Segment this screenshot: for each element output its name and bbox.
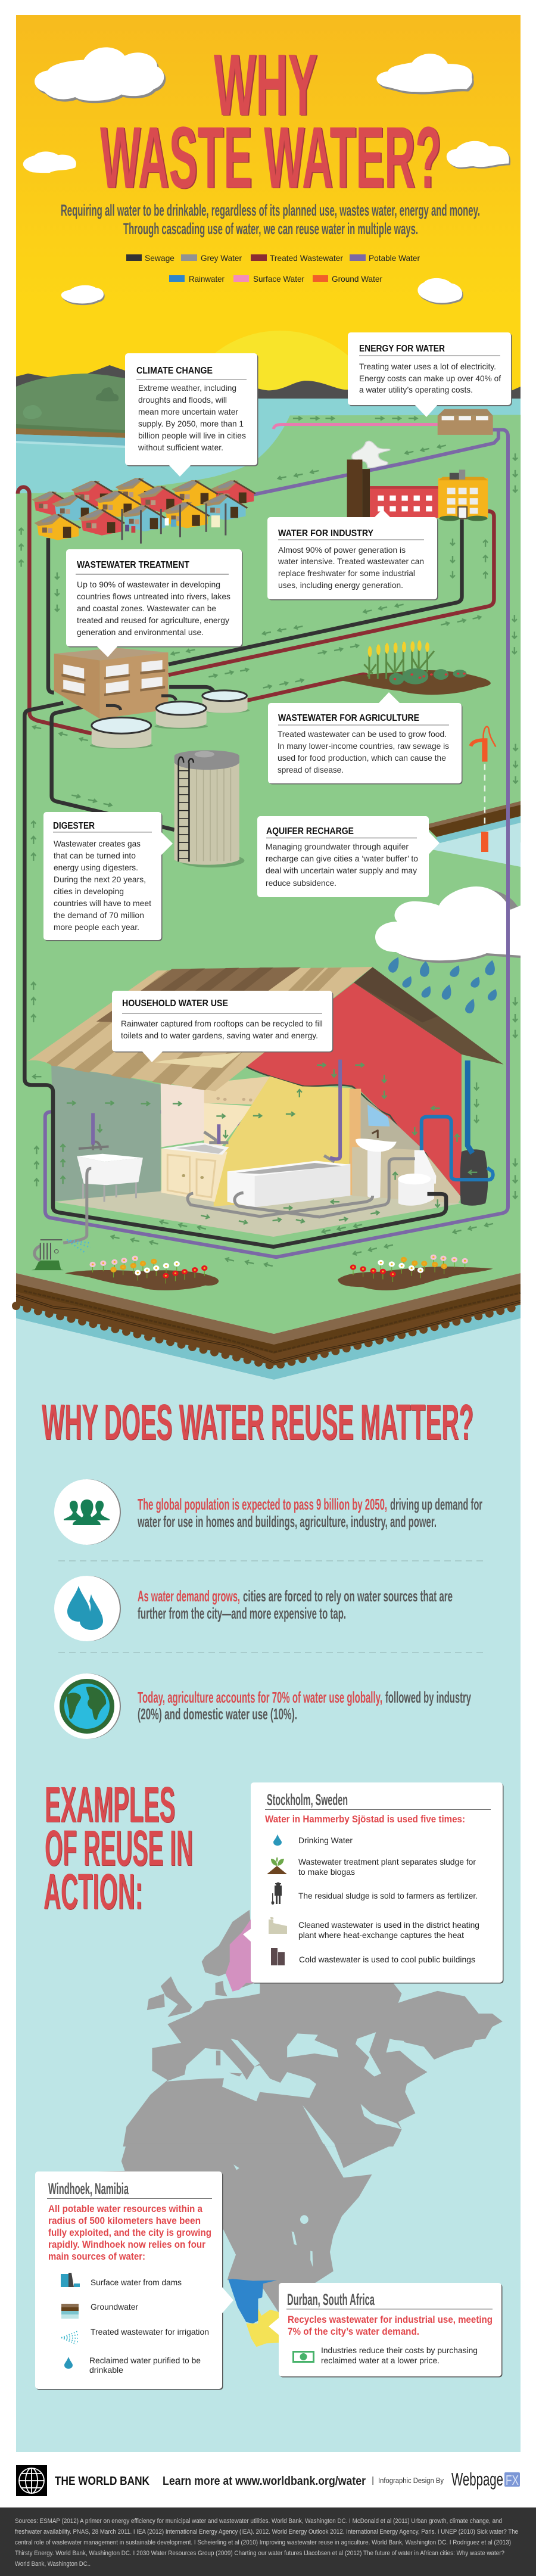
upper dark soil [16, 1284, 521, 1354]
icon: water drops [54, 1576, 121, 1641]
callout: water for industry: uses, including energy generation. [278, 580, 403, 590]
callout: energy for water: a water utility’s operating costs. [359, 385, 473, 394]
callout: wastewater treatment [66, 549, 243, 657]
callout: wastewater treatment: generation and environmental use. [77, 627, 204, 637]
callout: digester: energy using digesters. [54, 863, 138, 872]
text: OF REUSE IN [45, 1820, 193, 1876]
clothesline poles [122, 503, 226, 543]
icon: dam [61, 2273, 80, 2287]
item 2: Wastewater treatment plant separates sludge for [298, 1857, 476, 1866]
right eave [354, 967, 504, 1065]
arabia tip [334, 2144, 395, 2168]
icon: money [292, 2351, 314, 2363]
legend: Sewage [145, 253, 174, 263]
sky background [16, 15, 521, 432]
icon: drop [64, 2357, 73, 2369]
text: agriculture share: followed by industry [385, 1688, 471, 1706]
roof [27, 967, 504, 1091]
sun [174, 331, 385, 542]
lake and hills [16, 365, 521, 512]
legend: Potable Water [369, 253, 420, 263]
webpagefx logo: Webpage [451, 2469, 503, 2490]
durban summary [288, 2314, 493, 2337]
floor [55, 1178, 462, 1237]
callout: aquifer recharge [257, 816, 440, 897]
legend: Treated Wastewater [270, 253, 343, 263]
footer sources [0, 2507, 536, 2576]
icon: plant [267, 1857, 287, 1874]
hill base band [16, 424, 220, 434]
lower water background [16, 1318, 521, 2452]
green strip arrows top [293, 416, 417, 420]
callout: digester: cities in developing [54, 886, 124, 896]
callout: household water use: HOUSEHOLD WATER USE [122, 998, 228, 1009]
adriatic [230, 2039, 260, 2067]
callout: climate change: Extreme weather, including [138, 383, 236, 393]
cabinets [161, 1097, 253, 1202]
eurasia and north africa [123, 1940, 503, 2146]
cut edge wall [246, 1066, 462, 1197]
italy islands [216, 2051, 242, 2077]
subtitle [61, 201, 480, 238]
arrows household [31, 836, 518, 1268]
bath tub [228, 1156, 350, 1208]
callout: wastewater for agriculture: WASTEWATER FOR AGRICULTURE [278, 713, 419, 723]
callout: water for industry: replace freshwater for some industrial [278, 568, 415, 578]
green hill [16, 374, 220, 433]
item 4: Cleaned wastewater is used in the district heating [298, 1920, 479, 1930]
callout: climate change: supply. By 2050, more than 1 [138, 419, 244, 428]
sprinkler [32, 1240, 91, 1270]
kitchen lower wall [204, 1103, 253, 1150]
callout: digester: countries will have to meet [54, 898, 151, 908]
arrows on pipes [19, 444, 518, 828]
icon: drop [273, 1834, 282, 1846]
windhoek summary: All potable water resources within a [48, 2203, 202, 2214]
trees on hill [96, 387, 119, 402]
legend [126, 253, 420, 284]
durban item: reclaimed water at a lower price. [321, 2356, 440, 2365]
stockholm title: Stockholm, Sweden [267, 1791, 348, 1809]
pink kitchen wall [161, 1083, 219, 1147]
item 1: Drinking Water [298, 1835, 353, 1845]
lakes [233, 2164, 313, 2267]
callout: wastewater treatment: Up to 90% of wastewater in developing [77, 580, 220, 589]
treated pipe agriculture [247, 674, 369, 701]
dark roof patch [96, 967, 301, 1025]
callout: water for industry: Almost 90% of power generation is [278, 545, 406, 555]
mediterranean [167, 2048, 316, 2101]
icon: farmer [272, 1883, 282, 1905]
item: reclaimed: drinkable [89, 2365, 123, 2375]
callout: energy for water [348, 332, 512, 417]
heading: examples of reuse in action: ACTION: [43, 1863, 143, 1919]
callout: wastewater for agriculture: used for food production, which can cause the [278, 753, 446, 763]
kitchen upper cabinets [204, 1077, 270, 1105]
hill shore [16, 428, 220, 438]
callout: water for industry [267, 509, 438, 601]
item: reclaimed: Reclaimed water purified to be [89, 2356, 201, 2365]
light wave [16, 441, 220, 448]
corn and soil [334, 640, 491, 695]
callout: digester [43, 812, 173, 941]
bathroom wall [352, 1099, 462, 1203]
callout: water for industry: water intensive. Treated wastewater can [278, 556, 424, 566]
learn more: Learn more at www.worldbank.org/water [163, 2475, 366, 2488]
treated pipe left [18, 487, 92, 733]
callout: aquifer recharge: reduce subsidence. [266, 878, 336, 888]
sewage pipes [48, 538, 54, 692]
callout: wastewater for agriculture: Treated wastewater can be used to grow food. [278, 729, 447, 739]
clouds [23, 47, 510, 305]
treatment building [54, 648, 168, 719]
callout: wastewater for agriculture: In many lower-income countries, raw sewage is [278, 741, 449, 751]
ground cross-section [16, 1273, 521, 1380]
callout: digester: that can be turned into [54, 851, 136, 860]
legend: Ground Water [332, 274, 382, 284]
factory smoke [352, 441, 390, 468]
dark mountains left [16, 365, 197, 400]
water layer [16, 1281, 521, 1380]
light roof patch [154, 1052, 241, 1068]
rain drops [388, 957, 497, 1013]
title [100, 36, 441, 207]
callout: climate change: CLIMATE CHANGE [136, 366, 213, 376]
african continent [68, 2144, 372, 2313]
windhoek title: Windhoek, Namibia [48, 2180, 129, 2198]
callout: digester: During the next 20 years, [54, 875, 146, 884]
left utility wall [51, 1065, 161, 1201]
durban summary: 7% of the city’s water demand. [288, 2326, 419, 2337]
callout: wastewater treatment: treated and reused for agriculture, energy [77, 615, 229, 625]
potable pipes upper [253, 430, 508, 834]
strata line [16, 1295, 521, 1361]
legend: Rainwater [189, 274, 225, 284]
yellow wall [214, 1077, 350, 1206]
callout: wastewater treatment: and coastal zones. Wastewater can be [77, 603, 216, 613]
great britain [161, 1976, 192, 2017]
text: demand: further from the city—and more expensive to tap. [138, 1604, 346, 1622]
hand pump [469, 727, 496, 762]
icon: people [54, 1479, 121, 1545]
ireland [147, 1993, 165, 2010]
text: demand: As water demand grows, [138, 1587, 240, 1605]
design credit: Infographic Design By [378, 2476, 444, 2485]
durban item [321, 2345, 478, 2365]
potable main right pipe [45, 834, 508, 1257]
callout: energy for water: Treating water uses a lot of electricity. [359, 362, 496, 371]
flower bed left [65, 1256, 219, 1290]
text: demand [138, 1587, 453, 1622]
namibia [228, 2279, 277, 2323]
red gable wall [246, 982, 462, 1197]
heading: examples of reuse in action: EXAMPLES [45, 1777, 175, 1833]
cloud 3 [23, 151, 76, 173]
digester tank [174, 750, 244, 867]
household illustration [24, 834, 518, 1290]
durban item: Industries reduce their costs by purchasing [321, 2345, 478, 2355]
windhoek summary: radius of 500 kilometers have been [48, 2215, 201, 2226]
cloud 5 [61, 285, 105, 305]
lake [16, 399, 521, 512]
sewage pipe [24, 834, 446, 1247]
rain barrel [460, 1149, 488, 1206]
kitchen faucet [204, 1132, 228, 1144]
left bush [27, 1060, 51, 1080]
illustration upper landscape [18, 409, 518, 867]
text: agriculture share: (20%) and domestic water use (10%). [138, 1705, 297, 1723]
callout: energy for water: Energy costs can make up over 40% of [359, 374, 501, 383]
windhoek summary [48, 2203, 211, 2262]
aquifer band [429, 801, 521, 867]
south africa [246, 2309, 281, 2347]
windhoek summary: fully exploited, and the city is growing [48, 2227, 211, 2238]
icon: groundwater layers [61, 2304, 79, 2319]
callout: aquifer recharge: deal with uncertain water supply and may [266, 866, 417, 875]
callout: climate change [125, 353, 258, 477]
dark soil [16, 1281, 521, 1365]
red sea [303, 2105, 336, 2146]
cloud 6 [417, 278, 463, 304]
rain cloud [375, 886, 521, 963]
callout: climate change: mean more uncertain water [138, 407, 238, 416]
cloud 4 [447, 141, 510, 169]
rain pipes [468, 1060, 472, 1153]
callout: aquifer recharge: AQUIFER RECHARGE [266, 826, 354, 836]
callout: wastewater treatment: countries flows untreated into rivers, lakes [77, 592, 230, 601]
legend: Grey Water [201, 253, 242, 263]
legend: Surface Water [253, 274, 304, 284]
durban title: Durban, South Africa [287, 2291, 375, 2309]
windhoek summary: rapidly. Windhoek now relies on four [48, 2239, 205, 2250]
callout: digester: the demand of 70 million [54, 910, 144, 920]
pedestal sink [356, 1130, 397, 1198]
item 4 [298, 1920, 479, 1940]
aral [387, 2039, 404, 2053]
callout: durban [269, 2283, 503, 2377]
tree left [23, 405, 42, 419]
text: agriculture share [138, 1688, 471, 1723]
icon: buildings [271, 1948, 285, 1965]
energy building [438, 409, 493, 435]
utility sink [77, 1141, 143, 1202]
logo: world bank [16, 2465, 47, 2496]
settling tanks [90, 690, 250, 749]
black sea [287, 2033, 338, 2058]
factory [347, 459, 488, 521]
map: africa [68, 2144, 395, 2347]
item 2: to make biogas [298, 1867, 355, 1877]
callout: aquifer recharge: recharge can give cities a ‘water buffer’ to [266, 854, 418, 863]
item 2 [298, 1857, 476, 1877]
denmark [216, 1981, 228, 1996]
item: irrigation: Treated wastewater for irrigation [91, 2327, 209, 2337]
cloud 2 [376, 54, 474, 94]
caspian [356, 2032, 381, 2077]
callout: digester: Wastewater creates gas [54, 839, 141, 848]
item 4: plant where heat-exchange captures the heat [298, 1930, 464, 1940]
icon: heating plant [269, 1917, 287, 1934]
pipe: surface water [273, 424, 440, 429]
treated pipe right [169, 511, 494, 675]
callout: wastewater for agriculture: spread of disease. [278, 765, 344, 774]
icon: spray [61, 2331, 78, 2344]
callout: digester: more people each year. [54, 922, 139, 932]
callout: stockholm [243, 1782, 504, 1984]
window [367, 1105, 389, 1127]
icon: globe [54, 1673, 121, 1739]
item: reclaimed [89, 2356, 201, 2375]
callout: household water use: Rainwater captured from rooftops can be recycled to fill [121, 1019, 323, 1028]
item: groundwater: Groundwater [91, 2302, 138, 2311]
world bank name: THE WORLD BANK [55, 2475, 149, 2488]
stockholm subtitle: Water in Hammerby Sjöstad is used five times: [265, 1813, 465, 1825]
persian gulf [361, 2104, 401, 2129]
callout: water for industry: WATER FOR INDUSTRY [278, 528, 373, 539]
callout: windhoek [35, 2171, 233, 2390]
speckled band [24, 1291, 521, 1352]
map: europe and north africa [123, 1910, 503, 2146]
cloud 1 [35, 47, 166, 103]
orange wall [350, 1089, 361, 1195]
sweden highlight [226, 1919, 255, 1992]
item: dams: Surface water from dams [91, 2278, 182, 2287]
callout: energy for water: ENERGY FOR WATER [359, 344, 445, 354]
callout: household water use: toilets and to water gardens, saving water and energy. [121, 1031, 318, 1040]
callout: aquifer recharge: Managing groundwater through aquifer [266, 842, 409, 851]
grey pipes [63, 1168, 91, 1243]
toilet [398, 1150, 436, 1206]
divider [58, 1560, 487, 1561]
callout: climate change: without sufficient water. [138, 443, 223, 452]
scandinavia [202, 1910, 255, 1991]
pointer [269, 2317, 279, 2335]
pointer [222, 2286, 233, 2314]
callout: climate change: droughts and floods, will [138, 395, 227, 405]
dark mountains right [219, 381, 521, 400]
callout: wastewater treatment: WASTEWATER TREATMENT [77, 560, 189, 570]
shallow water [16, 434, 220, 446]
light soil [16, 1273, 521, 1345]
household pipes [330, 1060, 340, 1159]
text: population [137, 1495, 482, 1530]
callout: climate change: billion people will live in cities [138, 431, 246, 440]
flower bed right [338, 1255, 493, 1290]
durban summary: Recycles wastewater for industrial use, meeting [288, 2314, 493, 2325]
pointer [243, 1928, 251, 1942]
item 5: Cold wastewater is used to cool public buildings [299, 1955, 475, 1964]
callout: digester: DIGESTER [53, 821, 95, 831]
webpagefx logo: FX [506, 2472, 519, 2488]
callout: household water use [112, 991, 334, 1062]
landscape green [16, 415, 521, 842]
divider [58, 1652, 487, 1653]
village houses [32, 478, 255, 540]
heading: examples of reuse in action [43, 1777, 193, 1919]
footer sources: World Bank, Washington DC.. [15, 2561, 91, 2568]
item 3: The residual sludge is sold to farmers as fertilizer. [298, 1891, 478, 1900]
title: WHY [214, 36, 317, 134]
windhoek summary: main sources of water: [48, 2251, 145, 2262]
dashed well line [484, 764, 485, 824]
callout: wastewater for agriculture [268, 692, 462, 784]
